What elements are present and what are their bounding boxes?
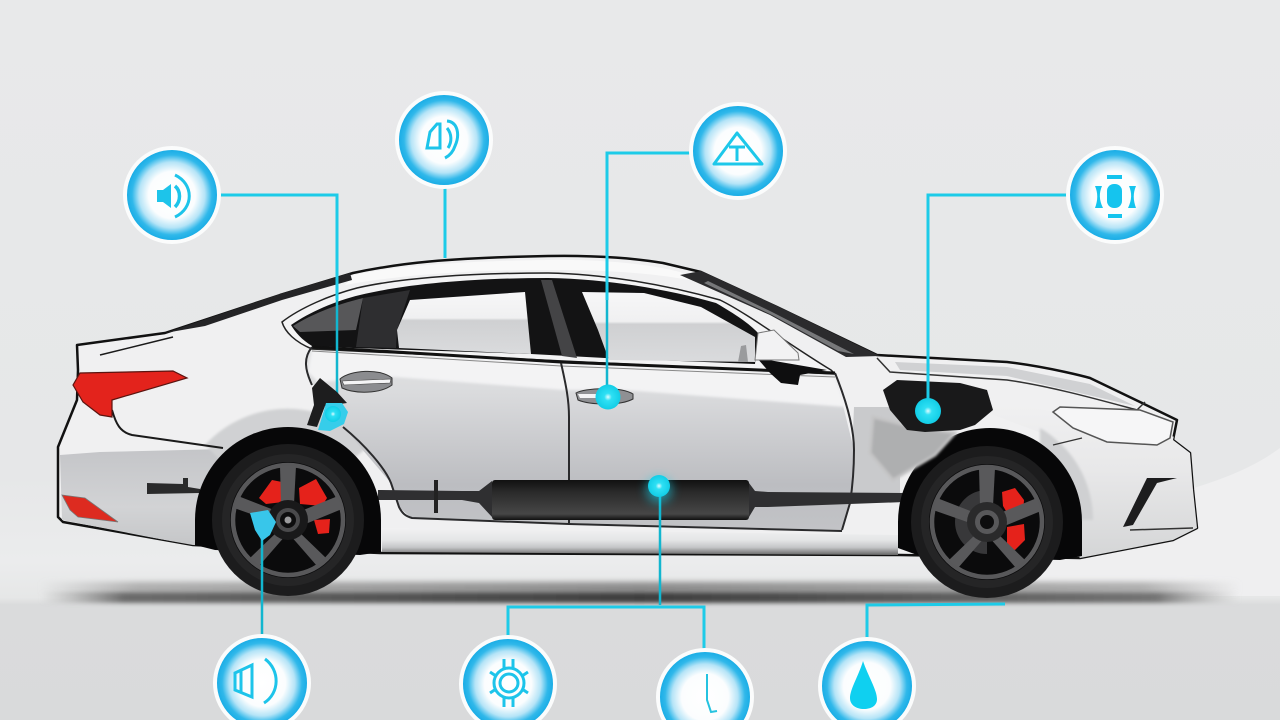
brake disc <box>955 490 987 554</box>
connector lines over car <box>262 300 660 637</box>
connector lines <box>218 153 1070 651</box>
rear tail pipe <box>147 478 200 494</box>
muffler <box>492 480 749 520</box>
bumper line <box>1130 528 1193 530</box>
dark window surround <box>291 278 758 364</box>
icon: bell wave <box>397 93 491 187</box>
icon: dipstick <box>658 650 752 720</box>
hotspot: engine <box>915 398 941 424</box>
ground shadow <box>40 582 1240 603</box>
red brake caliper <box>259 479 330 534</box>
B pillar <box>541 280 577 358</box>
rear wheel <box>212 444 364 596</box>
door lines <box>306 347 854 531</box>
door panels <box>306 347 854 530</box>
icon: horn <box>215 636 309 720</box>
car body <box>58 256 1197 558</box>
body shading <box>60 362 1200 560</box>
hotspot: door handle <box>596 384 620 410</box>
beltline <box>312 347 835 377</box>
exhaust clamp <box>434 480 438 513</box>
hotspot: muffler <box>646 475 672 503</box>
hotspot: rear hub <box>250 510 276 541</box>
car <box>58 256 1200 598</box>
headlight <box>1053 407 1173 445</box>
front window <box>582 292 755 362</box>
rear lamp <box>73 371 187 417</box>
icon: speaker <box>125 148 219 242</box>
engine block <box>870 380 993 480</box>
hood lines <box>877 358 1145 445</box>
front wheel arch <box>898 428 1082 560</box>
icon: water drop <box>820 639 914 720</box>
red brake caliper <box>1002 488 1025 550</box>
exhaust line <box>378 481 905 517</box>
rear reflector <box>62 495 118 522</box>
front grille vent <box>1123 478 1177 527</box>
icon: engine mount <box>1068 148 1162 242</box>
quarter glass <box>293 298 363 332</box>
windshield strip <box>680 271 880 357</box>
rear wheel arch <box>195 427 381 555</box>
rear glass strip <box>165 273 352 333</box>
window frame <box>282 273 835 374</box>
rear crease lines <box>100 337 223 448</box>
door handles <box>340 371 633 404</box>
icon: warning triangle <box>691 104 785 198</box>
rear window <box>397 292 531 354</box>
rocker sill <box>382 528 898 555</box>
front wheel <box>911 446 1063 598</box>
wing mirror <box>738 330 827 385</box>
roof highlight <box>345 260 700 285</box>
icon: sun gear <box>461 637 555 720</box>
hotspot: rear door <box>307 378 348 431</box>
